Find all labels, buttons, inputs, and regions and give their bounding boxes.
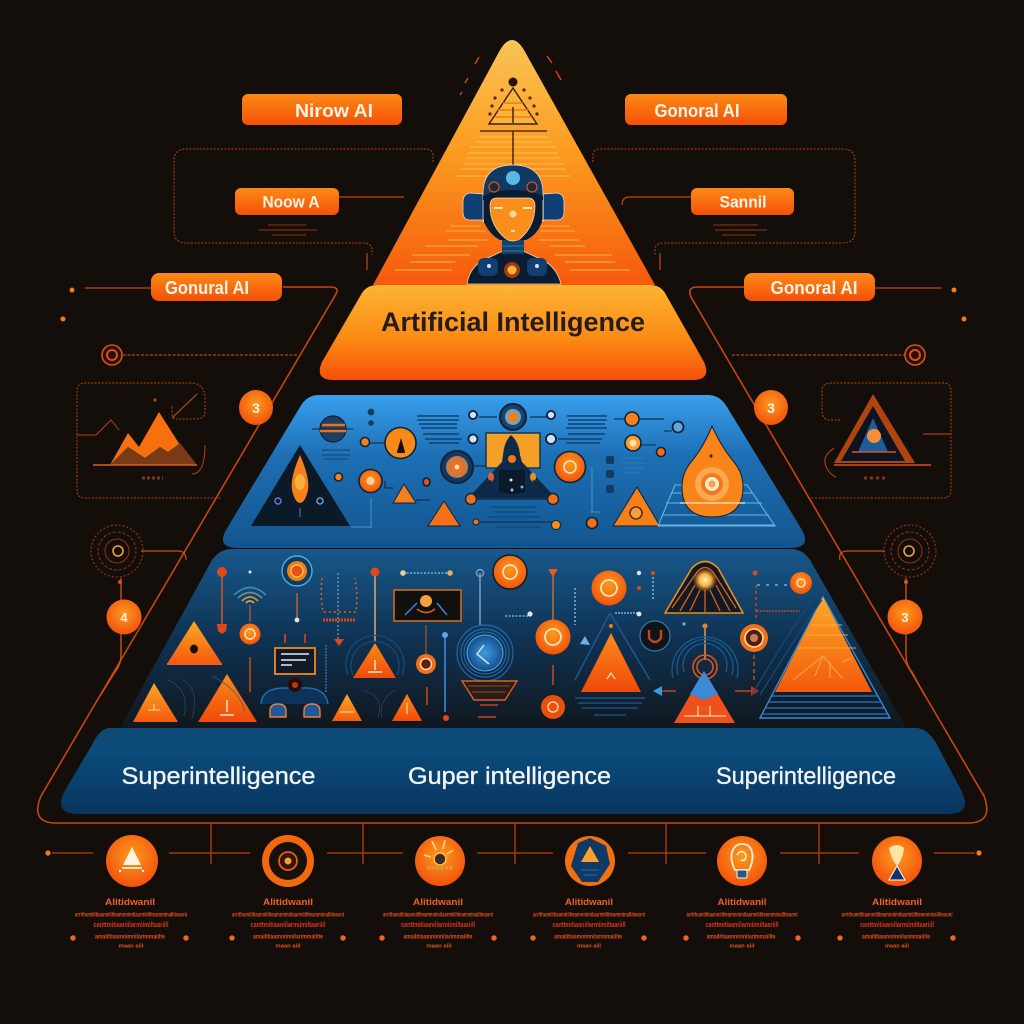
column 6 caption: maan aiil [885, 944, 909, 950]
column 1 caption: Alitidwanil [105, 897, 155, 908]
icon: central rocket screen [466, 433, 558, 504]
pill: Nirow AI: Nirow AI [295, 101, 373, 121]
icon: target circle top [282, 556, 312, 586]
column 4 caption: maan aiil [577, 944, 601, 950]
badge 4 left [100, 578, 142, 696]
caption strokes under small pills [258, 225, 767, 235]
icon: blue pyramid lines [658, 485, 775, 526]
spiral icon left [91, 525, 186, 577]
pill: Samil [691, 188, 794, 215]
column 1 caption: maan aiil [118, 944, 144, 950]
badge 3 right [754, 390, 788, 425]
tier: lower dark blue panel [120, 549, 906, 730]
panel: mountain illustration [77, 383, 220, 498]
badge 3 left: 3 [252, 400, 260, 416]
icon: top circle [500, 404, 526, 430]
pill: Gonoral AI right: Gonoral AI [770, 278, 858, 298]
column 4 caption: amailitiaamnimnilarimmaiilte [554, 934, 622, 940]
bottom connector rail [52, 824, 975, 864]
L connector lines [351, 467, 600, 528]
apex lower stripes [395, 226, 630, 270]
target icon left [102, 345, 297, 365]
icon: glowing dark ring [441, 451, 486, 483]
panel: triangle flame illustration [808, 383, 951, 498]
icon: arch triangle with sun [665, 562, 743, 613]
column 6 caption: arrithumilitiaanniiliteamnnimilaarmiiiliteamminalliteaoni [842, 912, 953, 918]
icon: framed bell [394, 590, 461, 621]
column 3 caption: amailitiaamnimnilarimmaiilte [404, 934, 473, 940]
column 2 caption [229, 897, 346, 950]
tier: upper blue panel [223, 395, 805, 548]
column 5 caption: Alitidwanil [718, 897, 766, 908]
column 4 caption [530, 897, 647, 950]
tier: Artificial Intelligence band [320, 285, 706, 380]
band label centre: Guper intelligence [408, 763, 611, 790]
badge 4 left: 4 [120, 610, 128, 625]
stems and small dots [222, 572, 800, 712]
column 4: shield triangle icon [565, 836, 615, 886]
column 1: triangle icon [106, 835, 158, 887]
icon: rings around triangle [346, 635, 404, 675]
icon: dark circle with U [640, 621, 670, 651]
column 3 caption: Alitidwanil [413, 897, 463, 908]
badge 3 right: 3 [767, 400, 775, 416]
spiral icon right [840, 525, 936, 577]
column 4 caption: canttmitiaaniilarmiimiltaariill [552, 922, 626, 929]
tier: apex triangle with robot [373, 40, 655, 285]
connector: left dotted frame [174, 149, 433, 255]
column 6 caption: amailitiaamnimnilarimmaiilte [862, 934, 930, 940]
column 4 caption: Alitidwanil [565, 897, 613, 908]
column 3 caption: arrithumilitiaanniiliteamnnimilaarmiiiliteamminalliteaoni [383, 912, 493, 918]
icon: wifi [234, 588, 266, 603]
target icon right [732, 345, 925, 365]
pill: Now A [235, 188, 339, 215]
icon: planet [312, 409, 374, 459]
icon: left black triangle with flame [251, 445, 350, 526]
connector: right dotted frame [593, 149, 855, 255]
apex horizontal stripes [456, 137, 570, 176]
icon: orange nodes [334, 412, 666, 528]
pill: Gonural AI: Gonural AI [165, 278, 249, 298]
column 5 caption: canttmitiaaniilarmiimiltaariill [706, 922, 779, 929]
band label left: Superintelligence [122, 763, 316, 790]
pyramid outer outline [38, 287, 987, 823]
column 1 caption: arrithumilitiaanniiliteamnnimilaarmiiiliteamminalliteaoni [75, 912, 187, 918]
column 5 caption: maan aiil [730, 944, 755, 950]
column 6 caption [837, 897, 956, 950]
icon: concentric rings with prism [653, 637, 759, 723]
pill: Gonural AI [151, 273, 282, 301]
column 2: eye ring icon [262, 835, 314, 887]
icon: small triangles [385, 481, 460, 526]
column 3: sun eye icon [415, 836, 465, 886]
icon: orange node rings [240, 555, 812, 719]
tier: Artificial Intelligence band: Artificial Intelligence [381, 307, 645, 337]
badge 3 lower right: 3 [901, 610, 909, 625]
column 2 caption: arrithumilitiaanniiliteamnnimilaarmiiiliteamminalliteaoni [232, 912, 344, 918]
icon: side curves by big triangle [752, 600, 822, 695]
tier: Superintelligence band [61, 728, 965, 814]
apex dashes [460, 56, 561, 95]
column 5 caption [683, 897, 801, 950]
badge 3 lower right [888, 578, 925, 696]
pill: Samil: Sannil [720, 192, 766, 212]
pill: General AI top: Gonoral AI [654, 101, 740, 121]
icon: orange triangles [133, 621, 422, 722]
column 3 caption: canttmitiaaniilarmiimiltaariill [401, 922, 475, 929]
icon: thin blue triangle with orange triangle [575, 613, 650, 715]
column 5 caption: arrithumilitiaanniiliteamnnimilaarmiiiliteamminalliteaoni [686, 912, 798, 918]
icon: small triangle with dots [480, 78, 547, 165]
icon: monitor [275, 634, 315, 674]
column 6 caption: canttmitiaaniilarmiimiltaariill [860, 922, 934, 929]
badge 3 left [239, 390, 273, 425]
column 3 caption: maan aiil [426, 944, 452, 950]
icon: robot headset [261, 678, 328, 717]
icon: large mountain triangle [760, 597, 890, 718]
column 5: light bulb icon [717, 836, 767, 886]
pill: Now A: Noow A [262, 192, 320, 212]
column 2 caption: amailitiaamnimnilarimmaiilte [253, 934, 323, 940]
icon: large orange drop [680, 426, 745, 517]
connector stubs by apex [85, 197, 941, 288]
column 1 caption [70, 897, 189, 950]
icon: chandelier [321, 573, 357, 640]
column 2 caption: maan aiil [276, 944, 301, 950]
icon: glowing globe on stand [457, 625, 517, 717]
pill: Nirow AI [242, 94, 402, 125]
pill: Gonoral AI right [744, 273, 875, 301]
column 6 caption: Alitidwanil [872, 897, 922, 908]
icon: dark feather curves [168, 676, 395, 718]
pill: General AI top [625, 94, 787, 125]
column 4 caption: arrithumilitiaanniiliteamnnimilaarmiiiliteamminalliteaoni [533, 912, 645, 918]
decorative dots [60, 288, 966, 322]
text lines left [417, 416, 672, 445]
column 6: hourglass icon [872, 836, 922, 886]
icon: small ring nodes [468, 411, 684, 444]
column 1 caption: canttmitiaaniilarmiimiltaariill [94, 922, 169, 929]
column 3 caption [379, 897, 497, 950]
column 2 caption: Alitidwanil [263, 897, 313, 908]
column 5 caption: amailitiaamnimnilarimmaiilte [706, 934, 776, 940]
column 1 caption: amailitiaamnimnilarimmaiilte [95, 934, 165, 940]
icon: triangle with ring [613, 487, 660, 526]
column 2 caption: canttmitiaaniilarmiimiltaariill [250, 922, 326, 929]
band label right: Superintelligence [716, 763, 896, 790]
small data squares [606, 456, 614, 493]
icon: robot [463, 165, 564, 284]
